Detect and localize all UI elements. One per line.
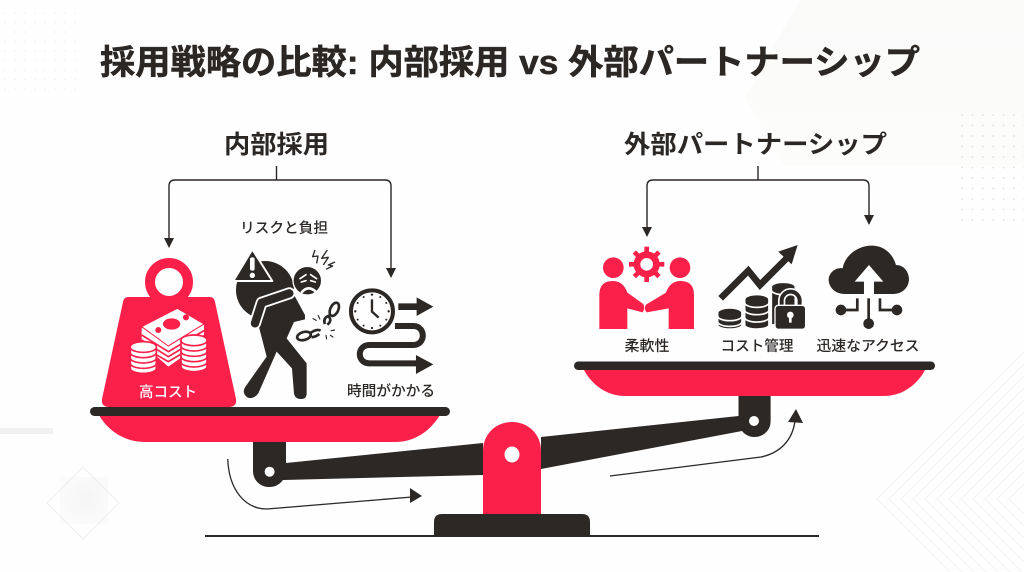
- arrow: left pan moves down: [228, 459, 422, 509]
- icon: banknotes: [142, 308, 204, 367]
- icon: padlock: [775, 292, 806, 329]
- right pan: [574, 362, 935, 396]
- icon: clock with winding arrows: [351, 290, 433, 374]
- label: 高コスト: 高コスト: [139, 384, 197, 401]
- icon: broken chain: [296, 301, 341, 342]
- fulcrum: [434, 422, 590, 536]
- icon: cloud access: [829, 246, 909, 329]
- icon: person carrying burden: [233, 249, 341, 399]
- icon: handshake and gear: [599, 247, 694, 329]
- icon: rising chart with coins and lock: [718, 245, 806, 329]
- bracket arrows: 内部採用: [164, 166, 396, 278]
- label: 時間がかかる: 時間がかかる: [347, 382, 435, 400]
- scale beam: [253, 390, 771, 487]
- icon: coin stacks: [130, 335, 207, 373]
- bracket arrows: 外部パートナーシップ: [642, 166, 874, 237]
- icon: warning triangle: [233, 249, 272, 281]
- label: 柔軟性: 柔軟性: [624, 338, 670, 355]
- heading: 内部採用: 内部採用: [224, 131, 329, 159]
- heading: 外部パートナーシップ: 外部パートナーシップ: [624, 131, 887, 159]
- left pan: [90, 407, 450, 442]
- label: リスクと負担: リスクと負担: [240, 220, 328, 237]
- title: 採用戦略の比較: 内部採用 vs 外部パートナーシップ: [100, 44, 920, 82]
- label: 迅速なアクセス: 迅速なアクセス: [816, 338, 920, 355]
- icon: gear: [629, 247, 664, 282]
- label: コスト管理: コスト管理: [720, 337, 794, 355]
- arrow: right pan moves up: [610, 409, 803, 476]
- icon: red weight with money: [102, 263, 236, 407]
- ground line: [205, 535, 819, 537]
